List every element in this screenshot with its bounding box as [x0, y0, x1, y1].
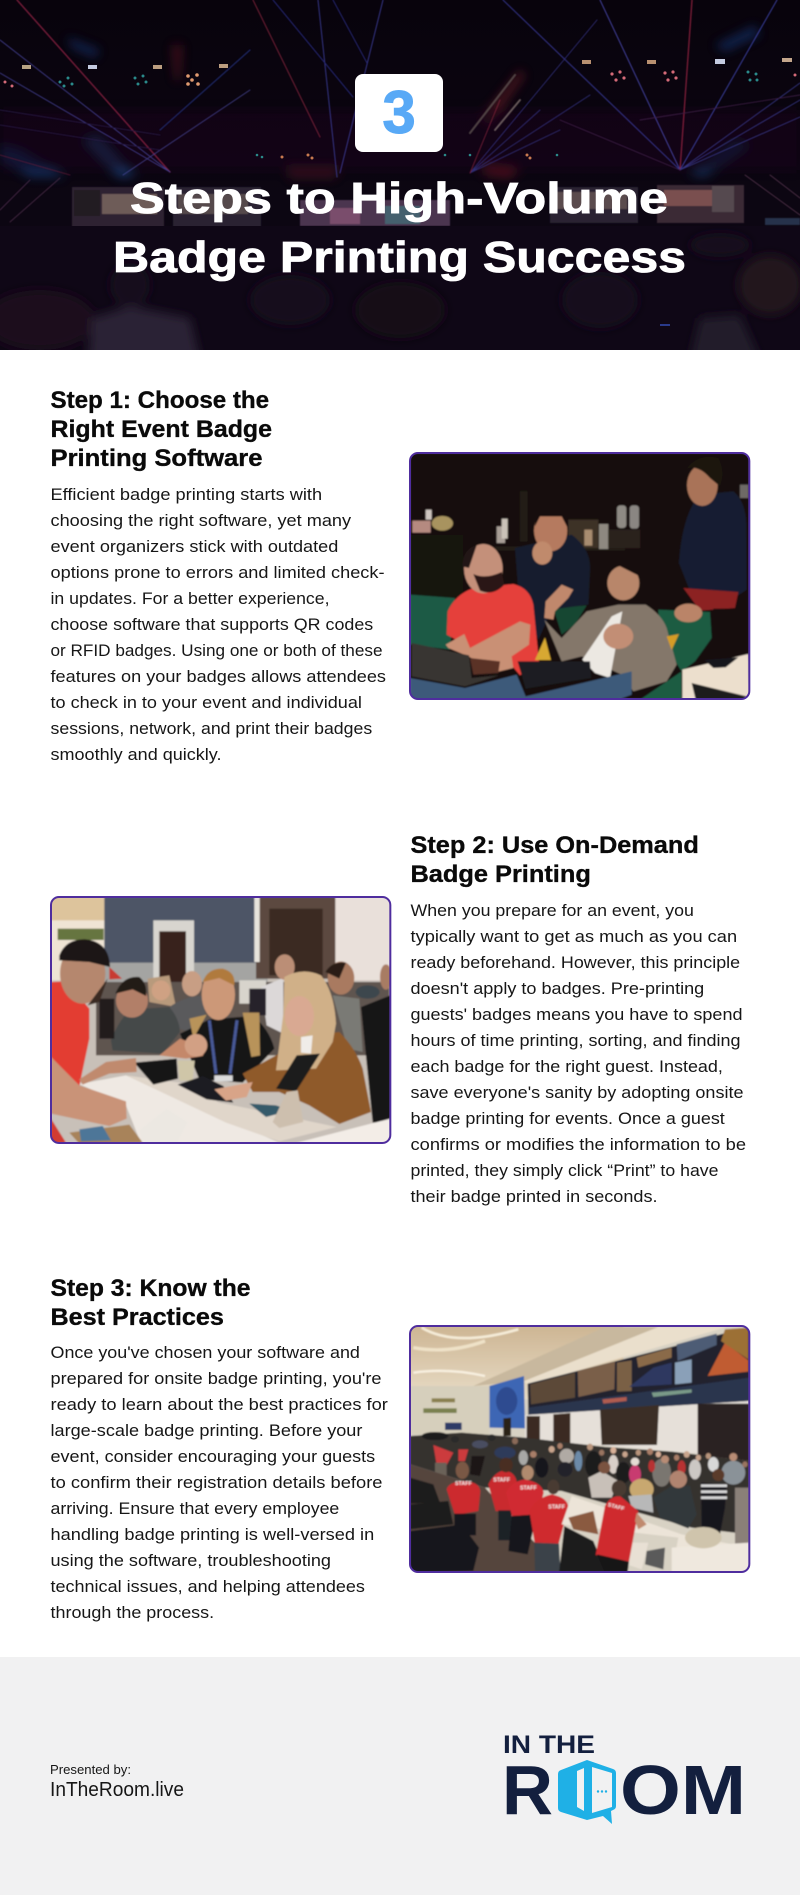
background crowd [96, 982, 389, 1055]
presented by credit: Presented by: [50, 1762, 131, 1777]
staff labels: STAFF [548, 1504, 566, 1510]
left far room [410, 1386, 489, 1434]
title: Badge Printing Success [113, 233, 686, 282]
hero background photo: stage with lasers [0, 0, 800, 360]
text block: step 3 body: handling badge printing is well-versed in [50, 1525, 374, 1544]
photo: team on a green sofa [410, 453, 749, 700]
smiling man [180, 1016, 274, 1083]
panel: footer [0, 1657, 800, 1895]
text block: step 3 body: event, consider encouraging your guests [50, 1447, 375, 1466]
title: Steps to High-Volume [130, 174, 668, 223]
text block: step 1 body: choose software that supports QR codes [50, 615, 373, 634]
badge with number 3 [355, 74, 443, 152]
text block: step 3 body: large-scale badge printing. Before your [50, 1421, 363, 1440]
text block: step 2 body: hours of time printing, sorting, and finding [410, 1031, 740, 1050]
woman in brown jacket [243, 1032, 371, 1124]
text block: step 1 body: smoothly and quickly. [50, 745, 222, 764]
text block: step 3 body: to confirm their registration details before [50, 1473, 382, 1492]
text block: step 3 body: arriving. Ensure that every employee [50, 1499, 339, 1518]
laser beams [0, 0, 800, 222]
heading: step 2: Step 2: Use On-Demand [410, 832, 699, 859]
heading: step 1: Step 1: Choose the [50, 387, 269, 414]
presented by credit [50, 1762, 184, 1801]
staff labels [455, 1478, 626, 1513]
counter [560, 1496, 726, 1548]
sofa [410, 595, 455, 650]
text block: step 3 body: using the software, troubleshooting [50, 1551, 331, 1570]
logo: In The Room: OM [620, 1751, 746, 1829]
text block: step 1 body: choosing the right software, yet many [50, 511, 352, 530]
text block: step 2 body [410, 901, 746, 1206]
text block: step 3 body: Once you've chosen your software and [50, 1343, 360, 1362]
text block: step 2 body: printed, they simply click “Print” to have [410, 1161, 718, 1180]
text block: step 3 body [50, 1343, 388, 1622]
title [113, 174, 686, 282]
panel: step 2 [51, 832, 746, 1206]
man in red at left [51, 981, 89, 1086]
laptops [412, 643, 499, 686]
presented by credit: InTheRoom.live [50, 1779, 184, 1801]
text block: step 2 body: typically want to get as much as you can [410, 927, 737, 946]
heading: step 1 [50, 387, 272, 472]
text block: step 2 body: each badge for the right guest. Instead, [410, 1057, 723, 1076]
text block: step 1 body: Efficient badge printing starts with [50, 485, 322, 504]
text block: step 1 body: or RFID badges. Using one or both of these [50, 641, 382, 660]
crowd mass [410, 1433, 749, 1534]
heading: step 3: Best Practices [50, 1304, 224, 1331]
text block: step 3 body: technical issues, and helping attendees [50, 1577, 365, 1596]
man 2 with hoodie [515, 535, 590, 640]
stage lights [4, 58, 796, 160]
jeans [410, 671, 632, 700]
text block: step 2 body: their badge printed in seconds. [410, 1187, 658, 1206]
staff labels: STAFF [455, 1481, 472, 1487]
counter items [134, 1059, 178, 1085]
text block: step 1 body: to check in to your event and individual [50, 693, 362, 712]
cushions [535, 637, 551, 660]
man 4 standing [679, 491, 747, 610]
ceiling [410, 1326, 623, 1399]
staff labels: STAFF [493, 1478, 511, 1484]
text block: step 1 body: features on your badges allows attendees [50, 667, 386, 686]
heading: step 1: Right Event Badge [50, 416, 272, 443]
staff group [447, 1481, 480, 1515]
audience [0, 226, 800, 360]
heading: step 1: Printing Software [50, 445, 262, 472]
photo: staff and crowd in convention lobby [410, 1326, 749, 1574]
text block: step 2 body: doesn't apply to badges. Pre-printing [410, 979, 704, 998]
text block: step 2 body: badge printing for events. Once a guest [410, 1109, 725, 1128]
text block: step 3 body: through the process. [50, 1603, 214, 1622]
staff labels: STAFF [520, 1485, 537, 1491]
text block: step 2 body: save everyone's sanity by adopting onsite [410, 1083, 744, 1102]
text block: step 2 body: When you prepare for an event, you [410, 901, 694, 920]
badge with number 3: 3 [382, 79, 416, 146]
text block: step 1 body: sessions, network, and print their badges [50, 719, 372, 738]
blue sign [489, 1376, 525, 1428]
logo: In The Room: IN THE [503, 1731, 595, 1759]
text block: step 3 body: ready to learn about the best practices for [50, 1395, 388, 1414]
seated man in grey [111, 1007, 180, 1054]
heading: step 3 [50, 1275, 250, 1331]
side table [682, 654, 749, 700]
text block: step 2 body: guests' badges means you have to spend [410, 1005, 742, 1024]
photo: attendees at a registration counter [51, 897, 392, 1144]
staff labels: STAFF [607, 1502, 626, 1513]
text block: step 3 body: prepared for onsite badge printing, you're [50, 1369, 382, 1388]
floor [410, 1464, 563, 1574]
text block: step 2 body: ready beforehand. However, this principle [410, 953, 740, 972]
heading: step 2: Badge Printing [410, 861, 591, 888]
panel: step 1 [50, 387, 749, 764]
logo: In The Room [502, 1731, 746, 1829]
staff member at counter [596, 1496, 638, 1562]
text block: step 1 body [50, 485, 386, 764]
stage screens [72, 185, 800, 227]
man 3 blazer [544, 605, 677, 691]
panel: step 3 [50, 1275, 749, 1622]
heading: step 3: Step 3: Know the [50, 1275, 250, 1302]
walls and doors [525, 1401, 749, 1458]
text block: step 1 body: event organizers stick with outdated [50, 537, 338, 556]
banner [528, 1327, 749, 1415]
counter [79, 1075, 279, 1144]
text block: step 1 body: options prone to errors and limited check- [50, 563, 384, 582]
logo: In The Room: R [502, 1751, 553, 1829]
man 1 red shirt [447, 584, 539, 675]
text block: step 1 body: in updates. For a better experience, [50, 589, 330, 608]
heading: step 2 [410, 832, 699, 888]
icon: door speech bubble [558, 1760, 616, 1824]
hero banner [0, 0, 800, 360]
text block: step 2 body: confirms or modifies the information to be [410, 1135, 746, 1154]
